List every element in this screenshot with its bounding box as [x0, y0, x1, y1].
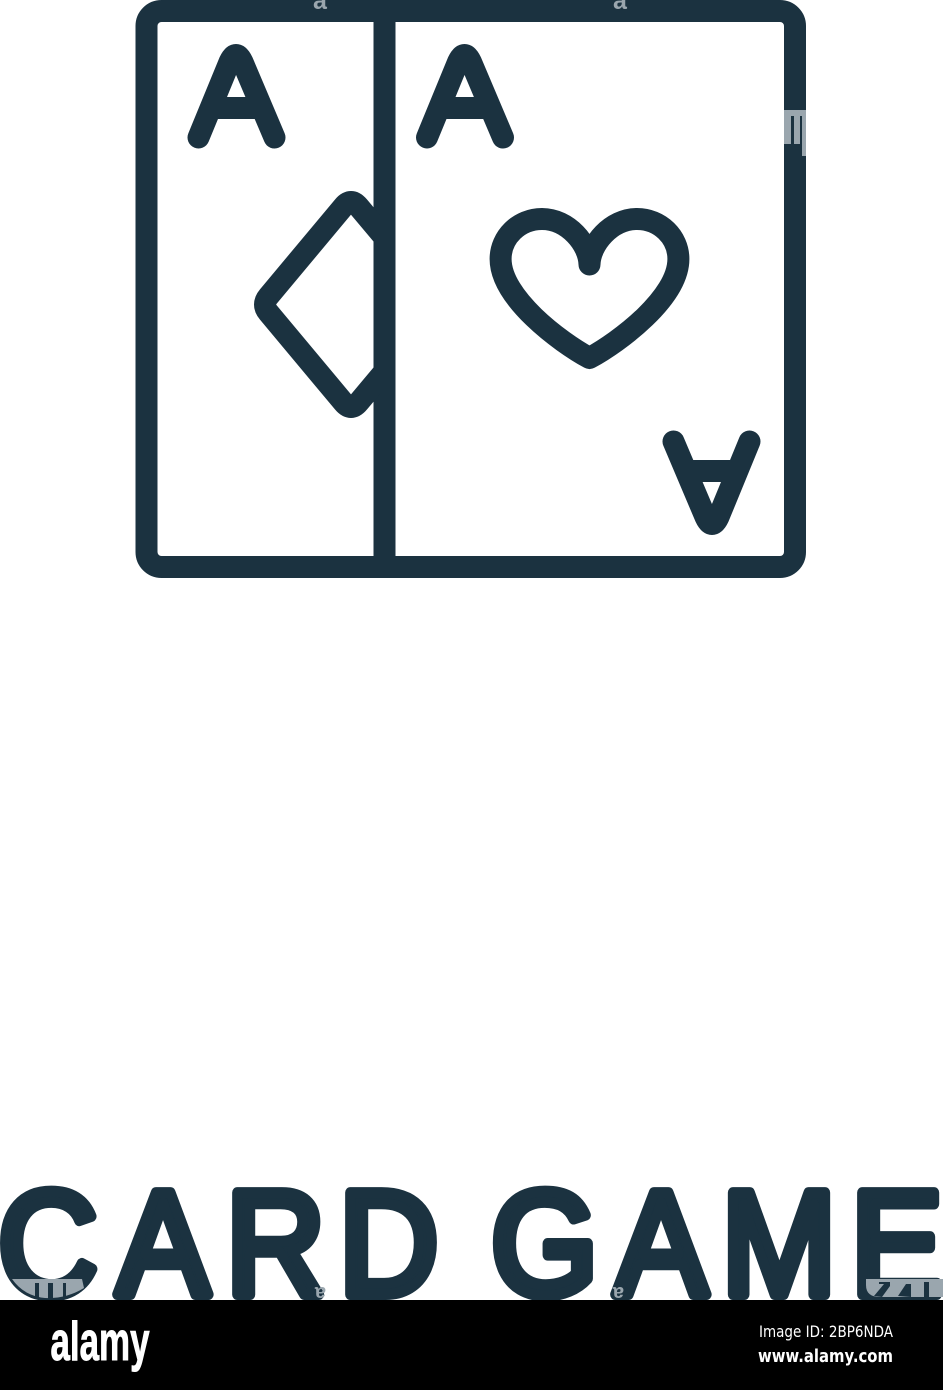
- footer bar: [0, 1300, 943, 1390]
- watermark fragments on letter feet: [314, 1282, 624, 1304]
- watermark fragments on icon: [313, 0, 628, 15]
- letter A: right card bottom, inverted: [674, 442, 750, 524]
- card divider line: [374, 11, 396, 567]
- icon: two playing cards: [146, 11, 795, 567]
- watermark fragment on right frame edge: [784, 110, 806, 156]
- title: CARD GAME: CARD GAME: [0, 1162, 943, 1327]
- card outer frame: [146, 11, 795, 567]
- watermark fragment on letter C: [12, 1279, 84, 1299]
- icon: heart: [501, 219, 678, 358]
- website: www.alamy.com: [758, 1346, 893, 1367]
- watermark fragment on letter E: [866, 1279, 943, 1297]
- letter A: left card: [198, 55, 274, 138]
- alamy logo: alamy: [50, 1310, 150, 1372]
- letter A: right card top: [427, 55, 503, 138]
- watermark fragments on letter feet: a: [314, 1282, 326, 1304]
- image id: Image ID: 2BP6NDA: [759, 1322, 893, 1341]
- watermark fragments on letter feet: a: [612, 1282, 624, 1304]
- icon: partial diamond: [265, 202, 400, 407]
